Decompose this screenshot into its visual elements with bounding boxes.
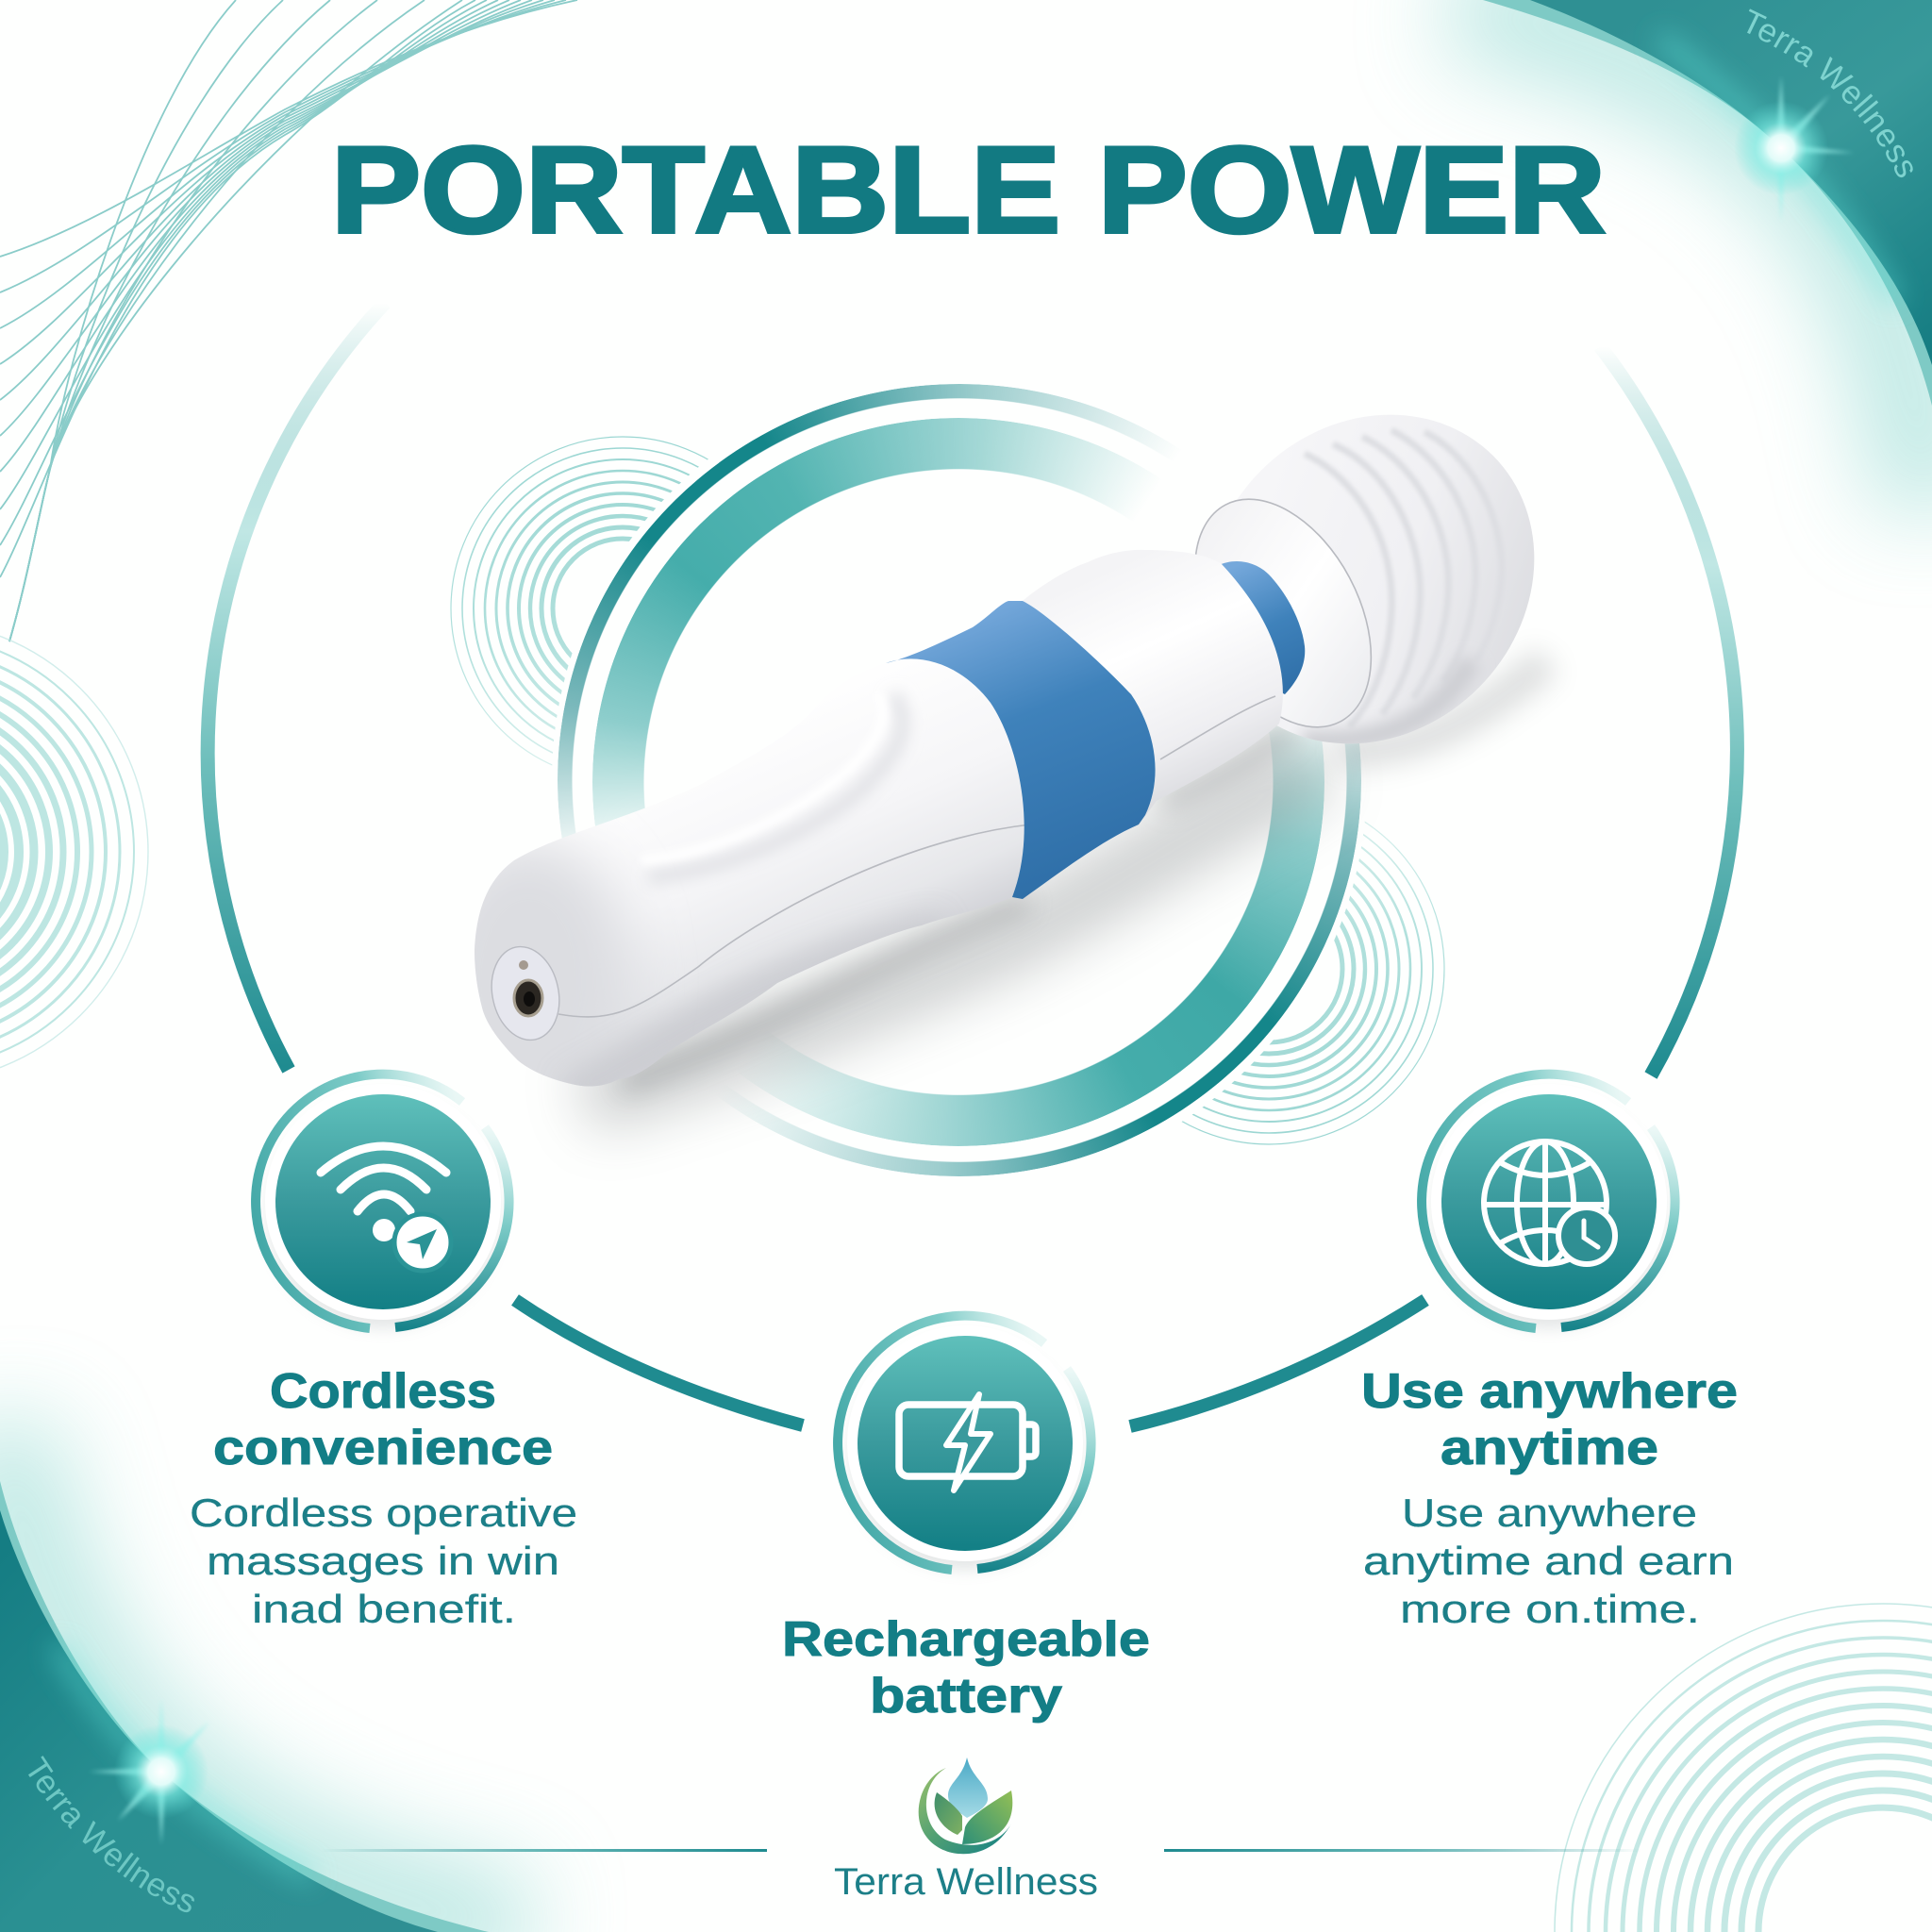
badge: use anywhere globe icon bbox=[1422, 1074, 1675, 1328]
outer arc: left bbox=[208, 303, 385, 1070]
ripple: left edge bbox=[0, 621, 148, 1083]
logo wordmark: Terra Wellness bbox=[834, 1861, 1098, 1903]
text block: use anywhere anytime: Use anywhere bbox=[1402, 1491, 1697, 1535]
watermark: top right: Terra Wellness bbox=[1747, 9, 1913, 177]
text block: rechargeable battery: battery bbox=[870, 1669, 1062, 1724]
body seam bbox=[558, 824, 1030, 1017]
rear seam bbox=[1160, 696, 1275, 759]
connector arc: cordless to battery bbox=[515, 1300, 803, 1425]
corner glow: bottom left bbox=[0, 1424, 528, 1932]
central ring: thin upper arc bbox=[558, 384, 1166, 838]
central ring: thick lower arc bbox=[752, 726, 1324, 1146]
text block: use anywhere anytime bbox=[1361, 1364, 1738, 1631]
logo: Terra Wellness mark bbox=[919, 1757, 1012, 1854]
text block: cordless convenience: convenience bbox=[213, 1421, 553, 1475]
neck bbox=[1217, 561, 1305, 694]
text block: use anywhere anytime: anytime bbox=[1441, 1421, 1658, 1475]
corner swoosh: top right bbox=[1483, 0, 1932, 406]
footer rule: right bbox=[1164, 1849, 1641, 1852]
badge: rechargeable battery icon bbox=[838, 1316, 1091, 1570]
front handle bbox=[425, 658, 1030, 1123]
footer rule: left bbox=[321, 1849, 767, 1852]
head bbox=[1138, 347, 1602, 811]
central ring: thin lower arc bbox=[731, 743, 1361, 1176]
text block: rechargeable battery bbox=[782, 1612, 1150, 1724]
watermark: bottom left: Terra Wellness bbox=[28, 1756, 194, 1913]
badge: cordless wifi icon bbox=[256, 1074, 509, 1328]
text block: cordless convenience bbox=[190, 1364, 577, 1631]
outer arc: right bbox=[1600, 346, 1737, 1075]
light flare: top right bbox=[1660, 38, 1896, 302]
central ring: thick upper arc bbox=[592, 418, 1147, 826]
device shadow bbox=[585, 660, 1547, 1099]
corner swoosh: bottom left bbox=[0, 1481, 489, 1932]
head front disc bbox=[1158, 470, 1407, 757]
text block: cordless convenience: massages in win bbox=[207, 1539, 559, 1583]
charging port bbox=[483, 941, 568, 1046]
ripple: behind device lower right bbox=[1181, 821, 1445, 1145]
text block: cordless convenience: Cordless bbox=[270, 1364, 496, 1419]
blue band bbox=[886, 601, 1156, 899]
device: massager wand bbox=[425, 347, 1602, 1123]
corner glow: top right bbox=[1453, 0, 1932, 509]
title: PORTABLE POWER bbox=[331, 121, 1606, 258]
light flare: bottom left bbox=[57, 1646, 311, 1877]
rear body segment bbox=[1023, 550, 1283, 824]
ripple: behind device upper left bbox=[450, 436, 708, 766]
icon: globe with clock bbox=[1484, 1141, 1615, 1264]
wave lines: top left bbox=[0, 0, 577, 641]
icon: battery with bolt bbox=[899, 1394, 1036, 1491]
text block: cordless convenience: Cordless operative bbox=[190, 1491, 577, 1535]
foreground: device, badges and text bbox=[192, 144, 1737, 1894]
icon: wifi with navigation arrow bbox=[321, 1146, 451, 1271]
text block: use anywhere anytime: anytime and earn bbox=[1363, 1539, 1734, 1583]
text block: cordless convenience: inad benefit. bbox=[252, 1587, 516, 1631]
grip groove bbox=[648, 694, 903, 877]
text block: use anywhere anytime: Use anywhere bbox=[1361, 1364, 1738, 1419]
connector arc: battery to anywhere bbox=[1130, 1300, 1425, 1426]
text block: rechargeable battery: Rechargeable bbox=[782, 1612, 1150, 1667]
text block: use anywhere anytime: more on.time. bbox=[1400, 1587, 1700, 1631]
end-cap shading bbox=[425, 840, 632, 1123]
ripple: bottom right bbox=[1555, 1604, 1932, 1932]
